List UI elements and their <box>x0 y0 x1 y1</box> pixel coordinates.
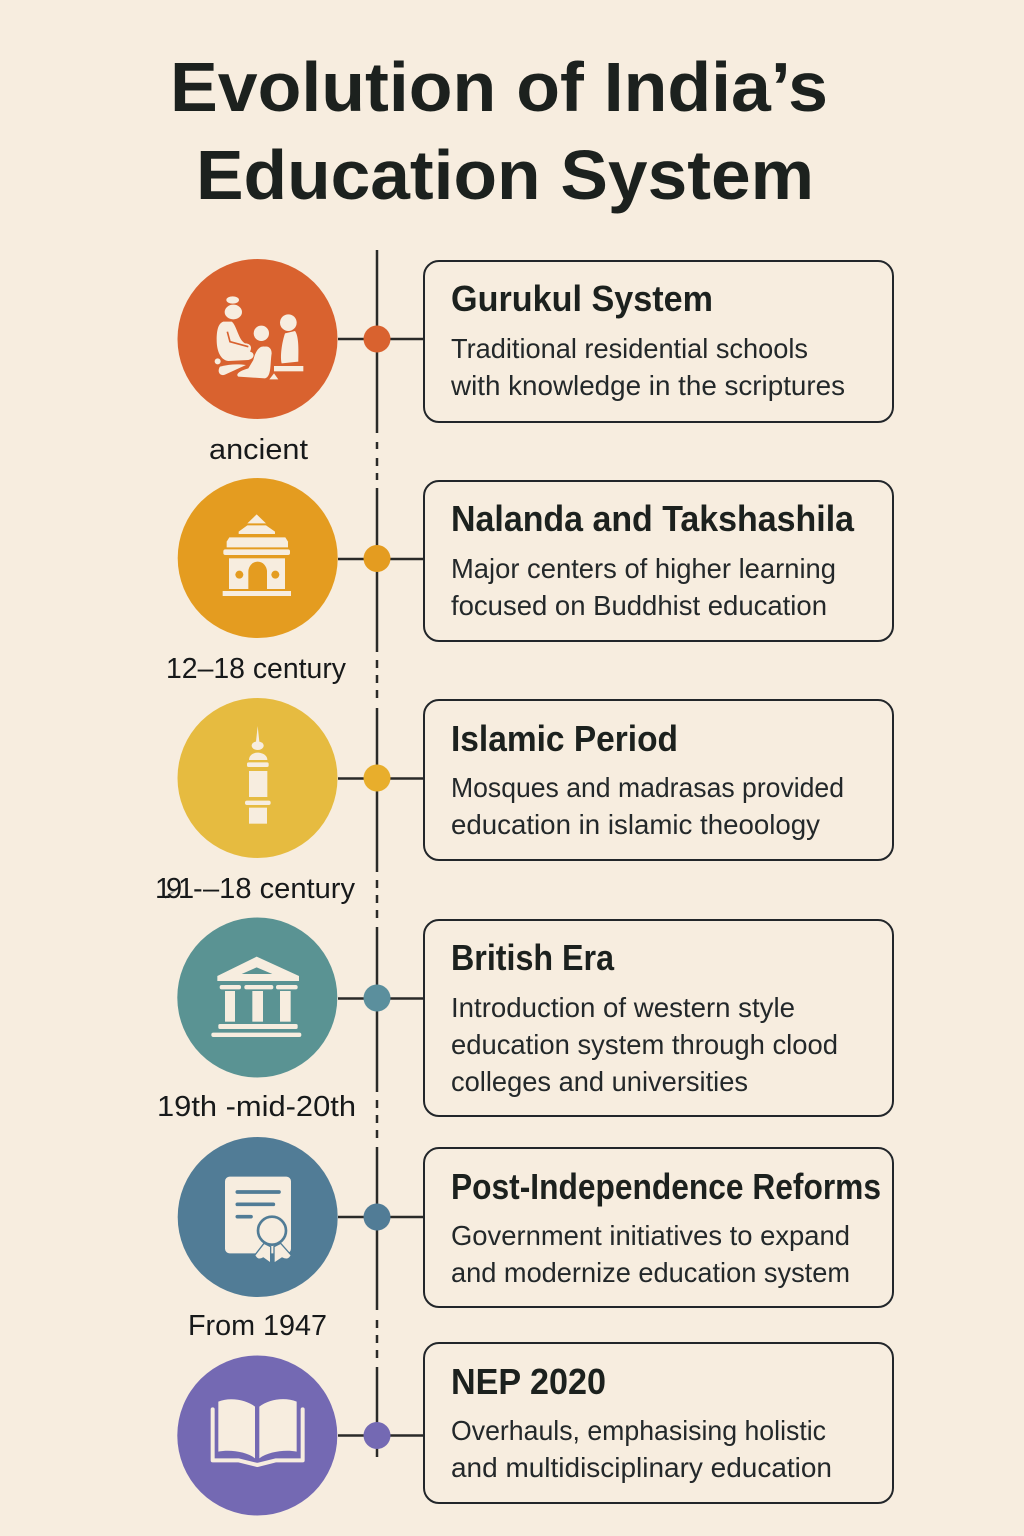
card: Nalanda and Takshashila: Major centers of higher learning <box>451 553 836 584</box>
title <box>170 48 828 214</box>
card: British Era: education system through clood <box>451 1029 838 1060</box>
connector and dot: British <box>338 984 424 1012</box>
card: Post-Independence Reforms: Post-Independence Reforms <box>451 1166 881 1207</box>
stage: Post-Independence Reforms <box>178 1137 893 1342</box>
stage: British Era <box>157 918 893 1123</box>
date label: ancient: ancient <box>209 434 308 466</box>
card: Post-Independence Reforms: and modernize education system <box>451 1257 850 1288</box>
card: Nalanda and Takshashila: focused on Buddhist education <box>451 590 827 621</box>
stage: Gurukul System <box>178 259 893 466</box>
date label: 191–18 century: 9 <box>166 873 182 905</box>
card: Nalanda and Takshashila <box>424 481 893 641</box>
card: Gurukul System: Traditional residential schools <box>451 333 808 364</box>
card: Islamic Period <box>424 700 893 860</box>
card: British Era: British Era <box>451 937 615 978</box>
icon: certificate with ribbon <box>178 1137 338 1297</box>
timeline spine <box>376 250 378 1457</box>
stage: Islamic Period <box>155 698 893 905</box>
date label: 191–18 century: - <box>193 873 203 905</box>
title: Education System <box>196 136 814 214</box>
icon: teacher and students <box>178 259 338 419</box>
title: Evolution of India’s <box>170 48 828 126</box>
connector and dot: Post-Independence <box>338 1204 424 1230</box>
card: Islamic Period: education in islamic theoology <box>451 809 820 840</box>
date label: 191–18 century: 1 <box>178 873 194 905</box>
stage: NEP 2020 <box>177 1343 893 1516</box>
connector and dot: Islamic <box>338 764 424 792</box>
date label: 191–18 century: –18 century <box>203 873 355 905</box>
date label: From 1947: From 1947 <box>188 1310 327 1342</box>
card: NEP 2020: and multidisciplinary education <box>451 1452 832 1483</box>
icon: open book <box>177 1356 337 1516</box>
card: Islamic Period: Islamic Period <box>451 718 678 759</box>
card: Post-Independence Reforms: Government initiatives to expand <box>451 1220 850 1251</box>
date label: 191–18 century: 1 <box>155 873 171 905</box>
date label: 12–18 century: 12–18 century <box>166 653 346 685</box>
card: Nalanda and Takshashila: Nalanda and Takshashila <box>451 498 855 539</box>
connector and dot: NEP <box>338 1422 424 1449</box>
card: British Era: colleges and universities <box>451 1066 748 1097</box>
icon: colonial college building <box>177 918 337 1078</box>
card: Gurukul System <box>424 261 893 422</box>
connector and dot: Nalanda <box>338 545 424 572</box>
icon: minaret <box>178 698 338 858</box>
card: NEP 2020: NEP 2020 <box>451 1361 606 1402</box>
card: Islamic Period: Mosques and madrasas provided <box>451 772 844 803</box>
card: Gurukul System: Gurukul System <box>451 278 713 319</box>
card: NEP 2020: Overhauls, emphasising holistic <box>451 1415 826 1446</box>
card: NEP 2020 <box>424 1343 893 1503</box>
card: Post-Independence Reforms <box>424 1148 893 1307</box>
icon: ancient university temple <box>178 478 338 638</box>
card: British Era: Introduction of western style <box>451 992 795 1023</box>
date label: 19th–mid-20th: 19th -mid-20th <box>157 1091 356 1123</box>
connector and dot: Gurukul <box>338 326 424 352</box>
card: Gurukul System: with knowledge in the scriptures <box>450 370 845 401</box>
card: British Era <box>424 920 893 1116</box>
stage: Nalanda and Takshashila <box>166 478 893 685</box>
